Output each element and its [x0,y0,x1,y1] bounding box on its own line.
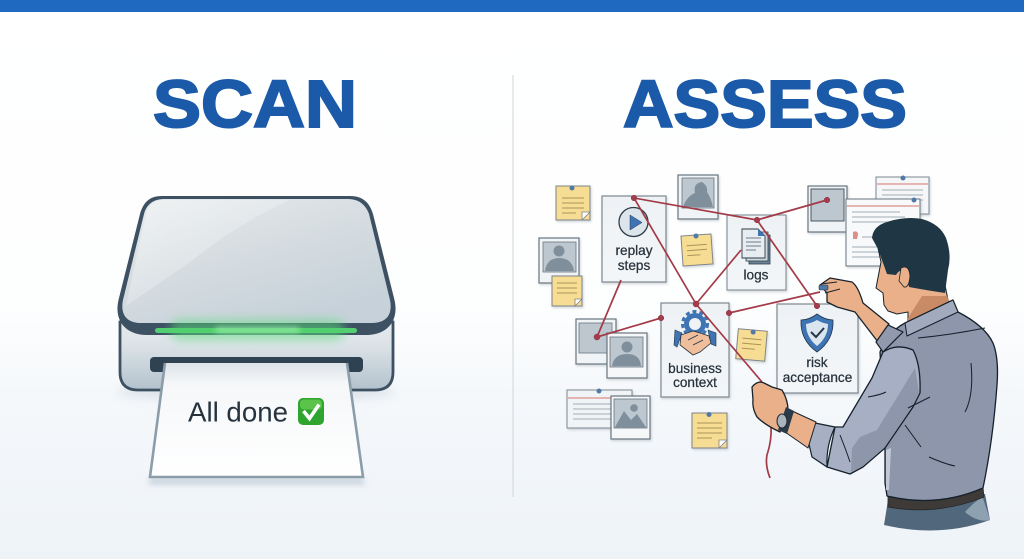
lowered arm sleeve [827,347,920,474]
card: risk acceptance: acceptance [783,370,852,385]
raised forearm and hand [819,278,889,342]
ear [899,267,910,287]
icon: shield [801,314,833,352]
document: top right back [876,176,929,214]
photo: person left [539,238,579,283]
paper [150,363,363,477]
icon: green check [298,398,324,425]
card: risk acceptance: risk [806,355,828,370]
scanner illustration [116,196,396,485]
trousers [884,494,990,530]
card: risk acceptance [777,304,858,393]
person [752,218,998,530]
note: bottom [692,412,727,448]
lower hand [752,382,788,432]
hair [872,218,950,293]
photo: landscape [611,396,650,439]
card: replay steps [602,196,666,282]
note: top left [556,186,590,220]
card: replay steps: replay [615,243,653,258]
lower forearm [785,410,816,448]
scanner body [120,322,393,390]
photo: person lower [607,333,647,378]
card: business context: context [673,375,717,390]
photo: top right [808,186,847,232]
note: left [552,276,582,306]
scanner lid [117,196,396,335]
heading: SCAN: SCAN [153,67,357,142]
icon: documents [742,229,770,264]
wristwatch [777,407,794,434]
belt [888,487,984,510]
heading: ASSESS: ASSESS [623,67,907,142]
divider [512,75,514,497]
card: business context: business [668,361,722,376]
icon: gear and handshake [674,312,716,355]
sleeve shaded side [851,368,919,472]
top bar [0,0,1024,12]
icon: play [619,208,648,236]
card: replay steps: steps [618,258,650,273]
shirt creases [840,328,985,466]
evidence board [539,175,929,478]
torso highlight [886,448,891,490]
sleeve cuff [808,423,835,467]
card: business context [661,303,729,397]
paper shadow [148,477,366,485]
photo: top centre [678,175,718,219]
card: logs [727,215,786,290]
neck and face [876,240,952,330]
card: logs: logs [744,268,769,282]
red strings [597,198,827,478]
status light [155,320,357,340]
note: tilted centre [681,232,713,266]
collar [905,300,958,336]
raised sleeve [876,325,903,352]
shirt torso [880,300,998,500]
document: top right front [846,198,920,266]
photo: blank group [576,319,616,364]
note: tilted right [736,328,767,361]
string pins [594,195,830,340]
paper slot [150,357,363,372]
paper text: All done [188,396,288,428]
document: wide [567,388,632,428]
